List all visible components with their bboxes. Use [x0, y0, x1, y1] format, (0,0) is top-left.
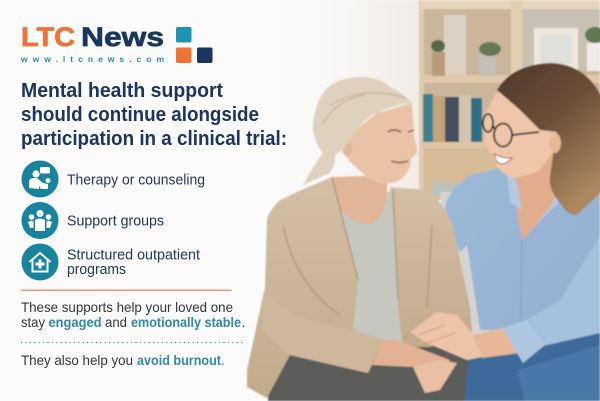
icon: group of people: [22, 202, 58, 239]
shelf objects: [444, 15, 466, 75]
text: supports: engaged: [48, 314, 102, 330]
text: burnout: They also help you: [21, 352, 133, 368]
curtain: [250, 0, 422, 195]
younger woman: shirt: [445, 166, 600, 360]
younger woman: smile: [494, 154, 512, 164]
younger woman: jeans: [462, 333, 600, 401]
younger woman: collar: [507, 172, 522, 210]
elder woman: ear: [342, 140, 352, 156]
elder woman: cardigan right: [390, 187, 472, 347]
text: supports: and: [105, 314, 127, 330]
elder woman: t-shirt: [337, 190, 404, 345]
bookshelf: [419, 0, 600, 200]
younger woman: forearm: [473, 328, 520, 358]
text: supports: emotionally stable: [131, 314, 241, 330]
logo word LTC: LTC: [21, 22, 75, 52]
elder hand: [372, 340, 450, 368]
text: supports: stay: [21, 314, 45, 330]
heading: participation in a clinical trial:: [21, 127, 287, 150]
heading: should continue alongside: [21, 103, 259, 126]
elder woman: headscarf: [303, 77, 412, 185]
text: burnout: avoid burnout: [137, 352, 221, 368]
list item: support groups: [22, 202, 164, 239]
younger woman: sleeve: [527, 237, 600, 345]
text: burnout: .: [221, 352, 225, 368]
photo: two women holding hands: [247, 0, 600, 401]
elder woman: cardigan folds: [283, 177, 432, 315]
heading: [21, 79, 287, 150]
elder woman: cardigan left: [247, 177, 383, 398]
elder woman: face: [342, 103, 417, 184]
label: support groups: Support groups: [67, 214, 164, 230]
younger woman: hair: [497, 63, 600, 215]
list item: therapy: [22, 160, 205, 198]
label: therapy: Therapy or counseling: [67, 172, 205, 188]
logo square navy: [197, 48, 212, 63]
label: outpatient programs: Structured outpatient: [67, 248, 200, 264]
elder woman: trousers: [268, 345, 470, 401]
younger woman: shirt placket: [520, 240, 522, 360]
icon: house with cross: [22, 244, 58, 280]
elder fingers: [413, 360, 457, 393]
elder woman: eyes and mouth: [388, 130, 414, 162]
younger woman: ear: [549, 133, 561, 153]
left fade over photo: [240, 0, 290, 200]
text: supports: .: [242, 314, 245, 330]
younger woman: glasses: [483, 114, 539, 146]
label: outpatient programs: programs: [67, 262, 126, 278]
logo url: www.ltcnews.com: [20, 54, 164, 64]
logo square teal: [176, 27, 192, 42]
elder woman: left sleeve: [262, 287, 383, 373]
younger woman: neck: [512, 130, 562, 240]
logo word News: News: [81, 22, 164, 52]
sofa: [440, 192, 500, 365]
hands: [372, 312, 482, 393]
text: supports: These supports help your loved one: [21, 299, 233, 315]
younger woman: face: [483, 92, 556, 177]
younger woman: cuff: [502, 320, 545, 363]
dotted divider: [21, 342, 243, 344]
elder woman: neck: [332, 175, 387, 225]
books: [423, 94, 433, 142]
logo: [20, 22, 212, 64]
logo square orange: [176, 48, 192, 63]
list item: outpatient programs: [22, 244, 200, 280]
orange divider: [21, 290, 232, 291]
icon: therapy: [22, 160, 58, 198]
heading: Mental health support: [21, 79, 223, 102]
younger hand: [410, 312, 482, 360]
